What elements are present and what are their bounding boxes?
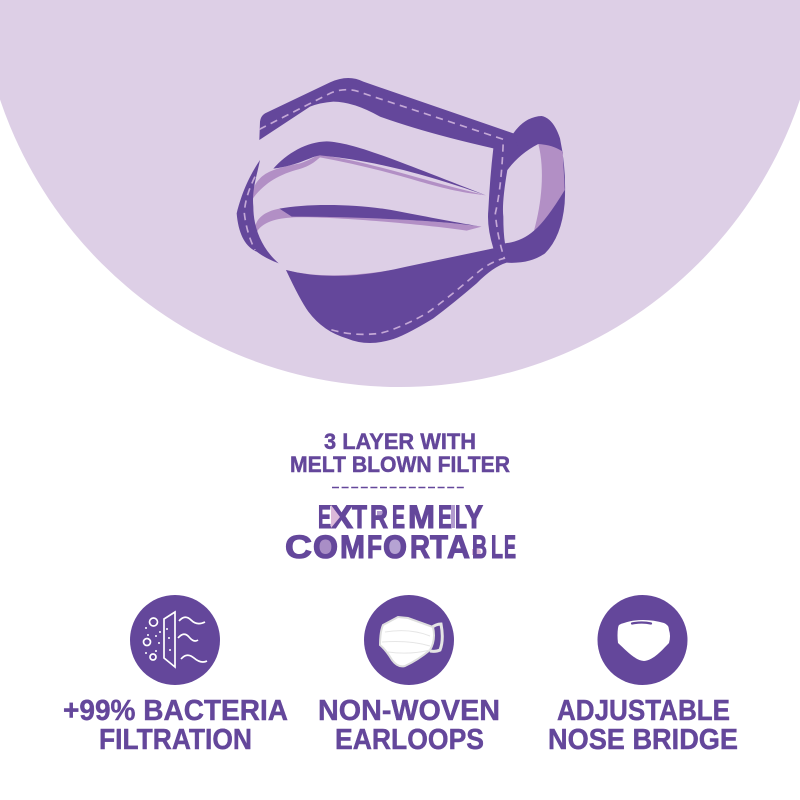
subheading: extremely comfortable: E [438,499,452,535]
subheading: extremely comfortable [285,499,516,565]
icon: white mask [364,595,454,685]
heading: 3 layer with melt blown filter: MELT BLOWN FILTER [290,452,510,477]
heading: 3 layer with melt blown filter [290,429,510,477]
subheading: extremely comfortable: C [285,529,312,565]
label: adjustable nose bridge: NOSE BRIDGE [548,724,738,756]
icon: bacteria filtration [130,595,220,685]
dashed divider [332,486,466,488]
subheading: extremely comfortable: A [447,529,470,565]
subheading: extremely comfortable: T [430,529,448,565]
subheading: extremely comfortable: L [455,499,467,535]
subheading: extremely comfortable: M [408,499,435,535]
icon: face mask illustration [237,78,565,343]
subheading: extremely comfortable: R [410,529,430,565]
label: bacteria filtration: FILTRATION [99,724,252,756]
label: adjustable nose bridge [548,695,738,756]
mask: stitching [244,90,504,334]
subheading: extremely comfortable: E [504,529,516,565]
subheading: extremely comfortable: E [392,499,405,535]
subheading: extremely comfortable: O [383,529,407,565]
heading: 3 layer with melt blown filter: 3 LAYER WITH [324,429,476,454]
label: bacteria filtration: +99% BACTERIA [63,695,288,727]
subheading: extremely comfortable: L [491,529,503,565]
label: non-woven earloops: EARLOOPS [335,724,484,756]
subheading: extremely comfortable: O [313,529,338,565]
mask: purple body and bands [237,78,565,343]
subheading: extremely comfortable: R [370,499,388,535]
background circle [0,0,800,387]
subheading: extremely comfortable: Y [465,499,483,535]
label: non-woven earloops [318,695,500,756]
label: non-woven earloops: NON-WOVEN [318,695,500,727]
subheading: extremely comfortable: T [352,499,367,535]
subheading: extremely comfortable: X [330,499,354,535]
mask: pleat shadows [252,144,565,278]
icon: adjustable nose bridge [598,595,688,685]
subheading: extremely comfortable: E [318,499,331,535]
label: bacteria filtration [63,695,288,756]
label: adjustable nose bridge: ADJUSTABLE [557,695,730,727]
subheading: extremely comfortable: F [367,529,382,565]
subheading: extremely comfortable: B [472,529,487,565]
subheading: extremely comfortable: M [340,529,365,565]
